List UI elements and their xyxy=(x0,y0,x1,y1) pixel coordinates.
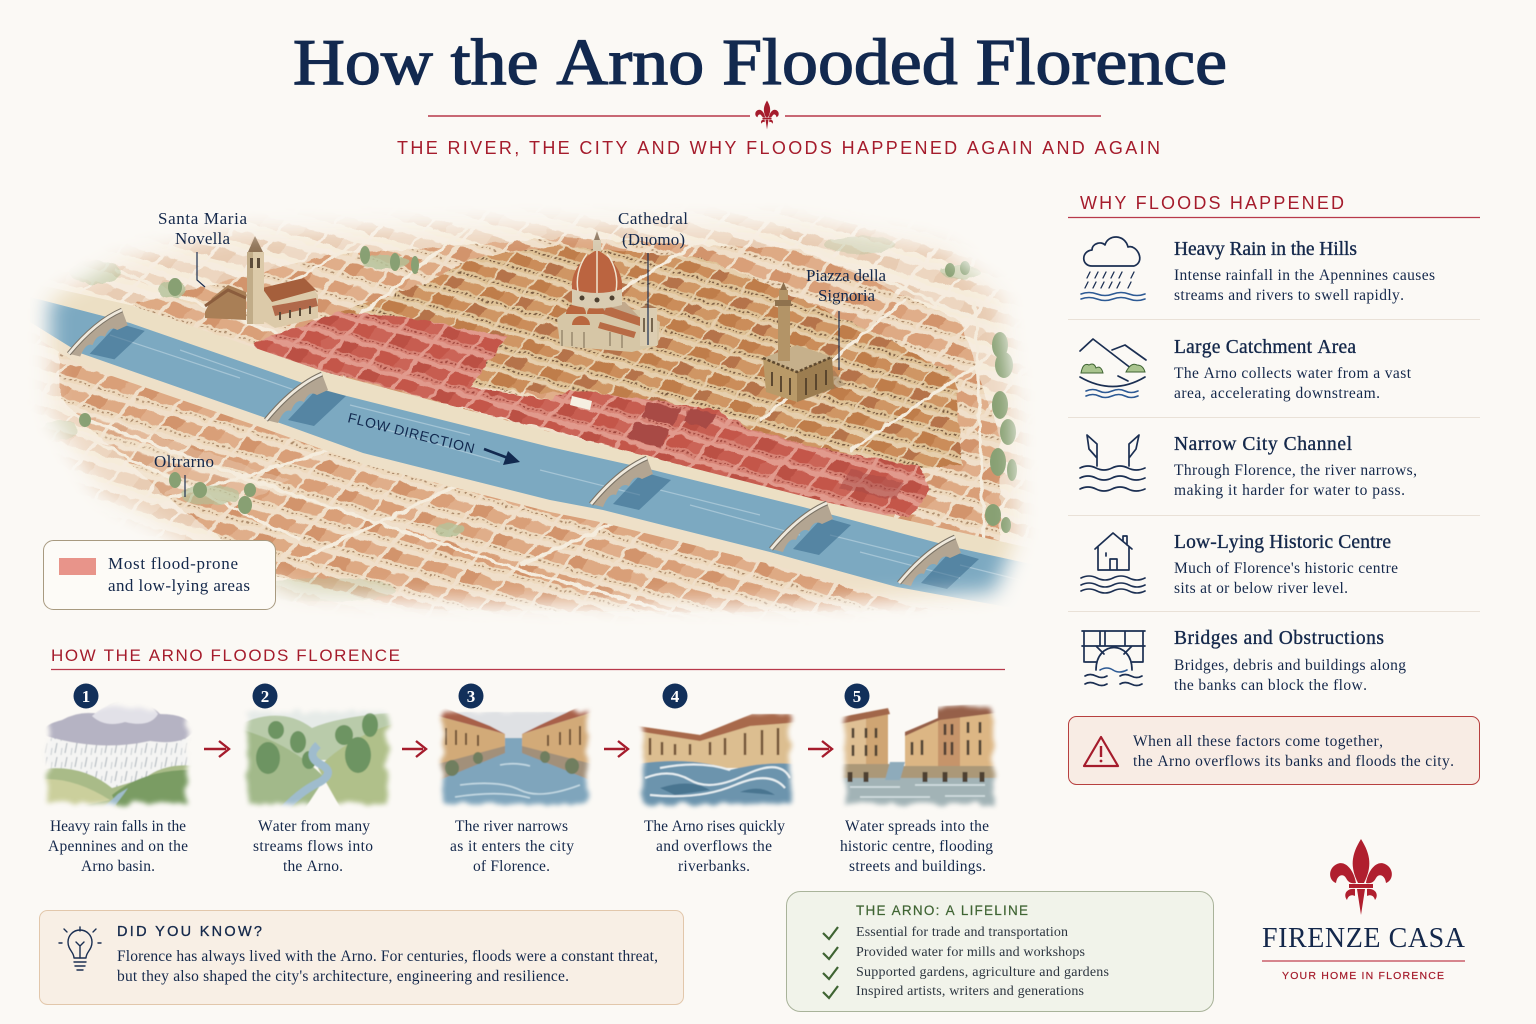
arrow 1 to 2 xyxy=(204,741,229,757)
label: Santa Maria Novella xyxy=(158,209,247,287)
icon: warning triangle xyxy=(1084,737,1118,766)
caption 3 xyxy=(450,818,574,875)
caption 2: Water from many xyxy=(258,818,370,835)
text: large catchment: The Arno collects water from a vast xyxy=(1174,365,1412,382)
step 5 xyxy=(832,684,1006,875)
Palazzo Vecchio xyxy=(763,282,845,402)
text: narrow channel xyxy=(1174,434,1417,499)
map artwork xyxy=(35,212,1028,614)
badge 3 xyxy=(458,684,484,708)
lifeline checklist: Provided water for mills and workshops xyxy=(856,945,1085,960)
legend xyxy=(44,540,276,610)
badge 1: 1 xyxy=(82,687,90,706)
lifeline checklist: Supported gardens, agriculture and gardens xyxy=(856,965,1109,980)
city core xyxy=(340,245,962,468)
panel: the Arno, a lifeline xyxy=(786,892,1214,1012)
did you know text: DID YOU KNOW? xyxy=(117,924,262,940)
illustration: streams through valley xyxy=(242,709,393,808)
caption 2: streams flows into xyxy=(253,838,373,855)
lifeline checklist xyxy=(823,925,1109,999)
caption 4: and overflows the xyxy=(656,838,772,855)
did you know text xyxy=(117,924,658,985)
pale building in zone xyxy=(570,396,592,410)
icon: mountains and river xyxy=(1080,339,1146,398)
north embankment xyxy=(40,285,1030,570)
bridges xyxy=(69,310,145,359)
caption 5: historic centre, flooding xyxy=(840,838,993,855)
text: large catchment xyxy=(1174,337,1412,402)
green plots xyxy=(42,236,980,602)
item: heavy rain xyxy=(1081,237,1435,304)
caption 4: The Arno rises quickly xyxy=(644,818,785,835)
warning text: When all these factors come together, xyxy=(1133,733,1383,750)
label: Cathedral (Duomo): Cathedral xyxy=(618,209,688,228)
icon: bridge arch xyxy=(1082,631,1145,686)
badge 4: 4 xyxy=(671,687,680,706)
panel: did you know xyxy=(40,910,684,1004)
text: heavy rain: Intense rainfall in the Apennines causes xyxy=(1174,267,1435,284)
label: Cathedral (Duomo) xyxy=(618,209,688,345)
badge 2 xyxy=(252,684,278,708)
caption 1: Arno basin. xyxy=(81,858,155,875)
caption 3: as it enters the city xyxy=(450,838,574,855)
step 3 xyxy=(438,684,592,871)
label: Santa Maria Novella: Santa Maria xyxy=(158,209,247,228)
map: illustrated aerial view of Florence xyxy=(20,190,1050,640)
flood zone darker blocks xyxy=(628,402,905,500)
arrow 3 to 4 xyxy=(604,741,628,757)
did you know text: but they also shaped the city's architecture, engineering and resilience. xyxy=(117,968,569,985)
lifeline checklist: Inspired artists, writers and generations xyxy=(856,984,1084,999)
step 1 xyxy=(43,684,192,871)
text: bridges: the banks can block the flow. xyxy=(1174,677,1367,694)
item: large catchment xyxy=(1080,337,1412,402)
flood-prone zone xyxy=(253,312,930,517)
badge 5 xyxy=(844,684,870,708)
label: Piazza della Signoria: Piazza della xyxy=(806,266,886,285)
panel heading: WHY FLOODS HAPPENED xyxy=(1080,193,1344,213)
illustration: flooded streets xyxy=(840,704,998,809)
text: narrow channel: Narrow City Channel xyxy=(1174,434,1353,455)
label: Santa Maria Novella: Novella xyxy=(175,229,230,248)
section heading: how the Arno floods Florence: HOW THE ARNO FLOODS FLORENCE xyxy=(51,646,400,665)
icon: rain cloud xyxy=(1081,237,1145,300)
text: low-lying centre: Much of Florence's historic centre xyxy=(1174,560,1398,577)
text: bridges: Bridges and Obstructions xyxy=(1174,628,1384,649)
caption 5: Water spreads into the xyxy=(845,818,989,835)
step 2 xyxy=(242,684,393,871)
panel: why floods happened xyxy=(1068,193,1480,694)
caption 2 xyxy=(253,818,373,875)
illustration: river narrows between buildings xyxy=(438,708,592,808)
legend: and low-lying areas xyxy=(108,576,250,595)
flow direction label and arrow xyxy=(346,409,520,465)
label: Oltrarno xyxy=(154,452,214,497)
illustration: rain over hills xyxy=(43,704,192,810)
caption 5: streets and buildings. xyxy=(849,858,986,875)
label: Piazza della Signoria xyxy=(806,266,886,370)
warning text: the Arno overflows its banks and floods the city. xyxy=(1133,753,1454,770)
roads xyxy=(28,225,1000,620)
caption 1: Heavy rain falls in the xyxy=(50,818,186,835)
river highlights xyxy=(110,335,1020,580)
caption 5 xyxy=(840,818,993,875)
legend: Most flood-prone xyxy=(108,554,238,573)
icon: light bulb xyxy=(59,927,101,970)
label: Cathedral (Duomo): (Duomo) xyxy=(622,230,685,249)
flow direction label and arrow: FLOW DIRECTION xyxy=(346,409,476,456)
did you know text: Florence has always lived with the Arno. For centuries, floods were a constant threat, xyxy=(117,948,658,965)
river xyxy=(30,297,1040,613)
warning text xyxy=(1133,733,1454,770)
south bank xyxy=(60,345,1000,612)
badge 2: 2 xyxy=(261,687,269,706)
caption 2: the Arno. xyxy=(283,858,343,875)
step 4 xyxy=(638,684,796,871)
title: How the Arno Flooded Florence xyxy=(293,26,1227,99)
label: Oltrarno: Oltrarno xyxy=(154,452,214,471)
text: large catchment: area, accelerating downstream. xyxy=(1174,385,1380,402)
text: heavy rain: streams and rivers to swell rapidly. xyxy=(1174,287,1404,304)
text: bridges: Bridges, debris and buildings along xyxy=(1174,657,1406,674)
badge 4 xyxy=(662,684,688,708)
illustration: river overflows xyxy=(638,713,796,810)
icon: channel walls and waves xyxy=(1080,435,1145,491)
badge 1 xyxy=(74,684,98,708)
Duomo xyxy=(557,231,660,352)
text: large catchment: Large Catchment Area xyxy=(1174,337,1356,358)
text: narrow channel: Through Florence, the river narrows, xyxy=(1174,462,1417,479)
icon: house in water xyxy=(1081,533,1145,593)
text: low-lying centre: Low-Lying Historic Centre xyxy=(1174,532,1391,553)
lifeline checklist: Essential for trade and transportation xyxy=(856,925,1068,940)
item: narrow channel xyxy=(1080,434,1417,499)
Santa Maria Novella xyxy=(205,236,318,328)
logo: Firenze Casa: YOUR HOME IN FLORENCE xyxy=(1282,970,1444,982)
north bank outer district xyxy=(130,238,1000,570)
item: low-lying centre xyxy=(1081,532,1398,597)
badge 3: 3 xyxy=(467,687,475,706)
text: narrow channel: making it harder for water to pass. xyxy=(1174,482,1405,499)
caption 1 xyxy=(48,818,188,875)
subtitle: THE RIVER, THE CITY AND WHY FLOODS HAPPENED AGAIN AND AGAIN xyxy=(397,138,1160,158)
caption 1: Apennines and on the xyxy=(48,838,188,855)
badge 5: 5 xyxy=(853,687,861,706)
trees xyxy=(79,246,1017,533)
caption 3: of Florence. xyxy=(473,858,550,875)
south embankment xyxy=(46,332,980,608)
label: Piazza della Signoria: Signoria xyxy=(818,286,875,305)
caption 4 xyxy=(644,818,785,875)
text: bridges xyxy=(1174,628,1406,694)
callout: warning xyxy=(1068,716,1480,784)
item: bridges xyxy=(1082,628,1406,694)
caption 3: The river narrows xyxy=(455,818,568,835)
caption 4: riverbanks. xyxy=(678,858,750,875)
logo: Firenze Casa xyxy=(1262,839,1466,982)
text: heavy rain: Heavy Rain in the Hills xyxy=(1174,239,1357,260)
text: low-lying centre: sits at or below river level. xyxy=(1174,580,1348,597)
city blocks xyxy=(38,212,1028,614)
text: low-lying centre xyxy=(1174,532,1398,597)
text: heavy rain xyxy=(1174,239,1435,304)
logo: Firenze Casa: FIRENZE CASA xyxy=(1262,923,1466,954)
title ornament: rule and fleur-de-lis xyxy=(428,101,1101,129)
arrow 4 to 5 xyxy=(808,741,832,757)
arrow 2 to 3 xyxy=(402,741,426,757)
lifeline heading: THE ARNO: A LIFELINE xyxy=(856,903,1028,918)
